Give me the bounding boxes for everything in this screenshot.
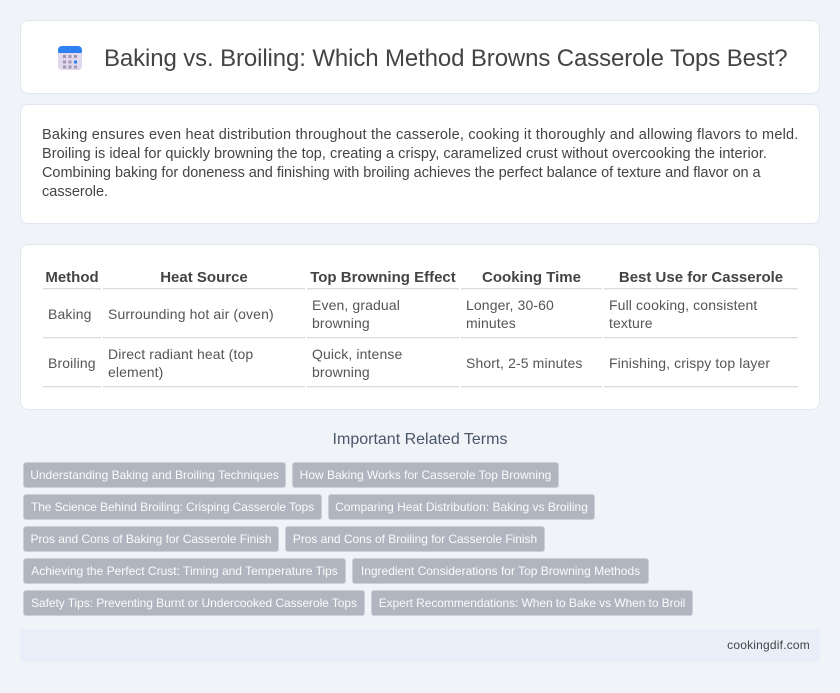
intro paragraph: Combining baking for doneness and finishing with broiling achieves the perfect balance of texture and flavor on a [42,165,761,181]
comparison table: Full cooking, consistent [609,297,757,313]
comparison table: Even, gradual [312,297,400,313]
comparison table: Direct radiant heat (top [108,346,253,362]
comparison table: Short, 2-5 minutes [466,355,583,371]
comparison table: texture [609,315,653,331]
comparison table: browning [312,364,370,380]
comparison table: Baking [48,306,92,322]
comparison table: Finishing, crispy top layer [609,355,770,371]
tag list: Comparing Heat Distribution: Baking vs Broiling [335,500,588,514]
comparison table: Best Use for Casserole [619,269,783,286]
comparison table: Surrounding hot air (oven) [108,306,274,322]
panel: title card [20,20,820,94]
comparison table: Heat Source [160,269,248,286]
comparison table: Broiling [48,355,96,371]
tag list: Ingredient Considerations for Top Browning Methods [361,564,640,578]
tag list: Expert Recommendations: When to Bake vs When to Broil [379,596,685,610]
comparison table: Top Browning Effect [310,269,456,286]
footer bar [20,629,820,662]
intro paragraph: Broiling is ideal for quickly browning the top, creating a crispy, caramelized crust without overcooking the interior. [42,146,767,162]
comparison table: Method [45,269,99,286]
comparison table: Cooking Time [482,269,581,286]
comparison table [43,269,798,388]
comparison table: Longer, 30-60 [466,297,554,313]
heading: important related terms: Important Related Terms [333,431,507,448]
comparison table: element) [108,364,163,380]
panel: comparison table [20,244,820,410]
tag list: Understanding Baking and Broiling Techniques [30,468,279,482]
comparison table: Quick, intense [312,346,402,362]
title: Baking vs. Broiling: Which Method Browns Casserole Tops Best? [104,45,788,72]
tag list: Achieving the Perfect Crust: Timing and Temperature Tips [31,564,338,578]
tag list: The Science Behind Broiling: Crisping Casserole Tops [31,500,314,514]
comparison table: browning [312,315,370,331]
comparison table: minutes [466,315,516,331]
panel: intro text [20,104,820,224]
footer source: cookingdif.com [727,638,810,652]
intro paragraph [42,127,798,200]
tag list: How Baking Works for Casserole Top Browning [300,468,551,482]
tag list: Safety Tips: Preventing Burnt or Undercooked Casserole Tops [31,596,357,610]
tag list: Pros and Cons of Baking for Casserole Finish [30,532,272,546]
tag list: Pros and Cons of Broiling for Casserole Finish [293,532,537,546]
tag list [23,462,693,616]
intro paragraph: Baking ensures even heat distribution throughout the casserole, cooking it thoroughly and allowing flavors to meld. [42,127,798,143]
icon: calendar [58,46,82,70]
intro paragraph: casserole. [42,184,108,200]
